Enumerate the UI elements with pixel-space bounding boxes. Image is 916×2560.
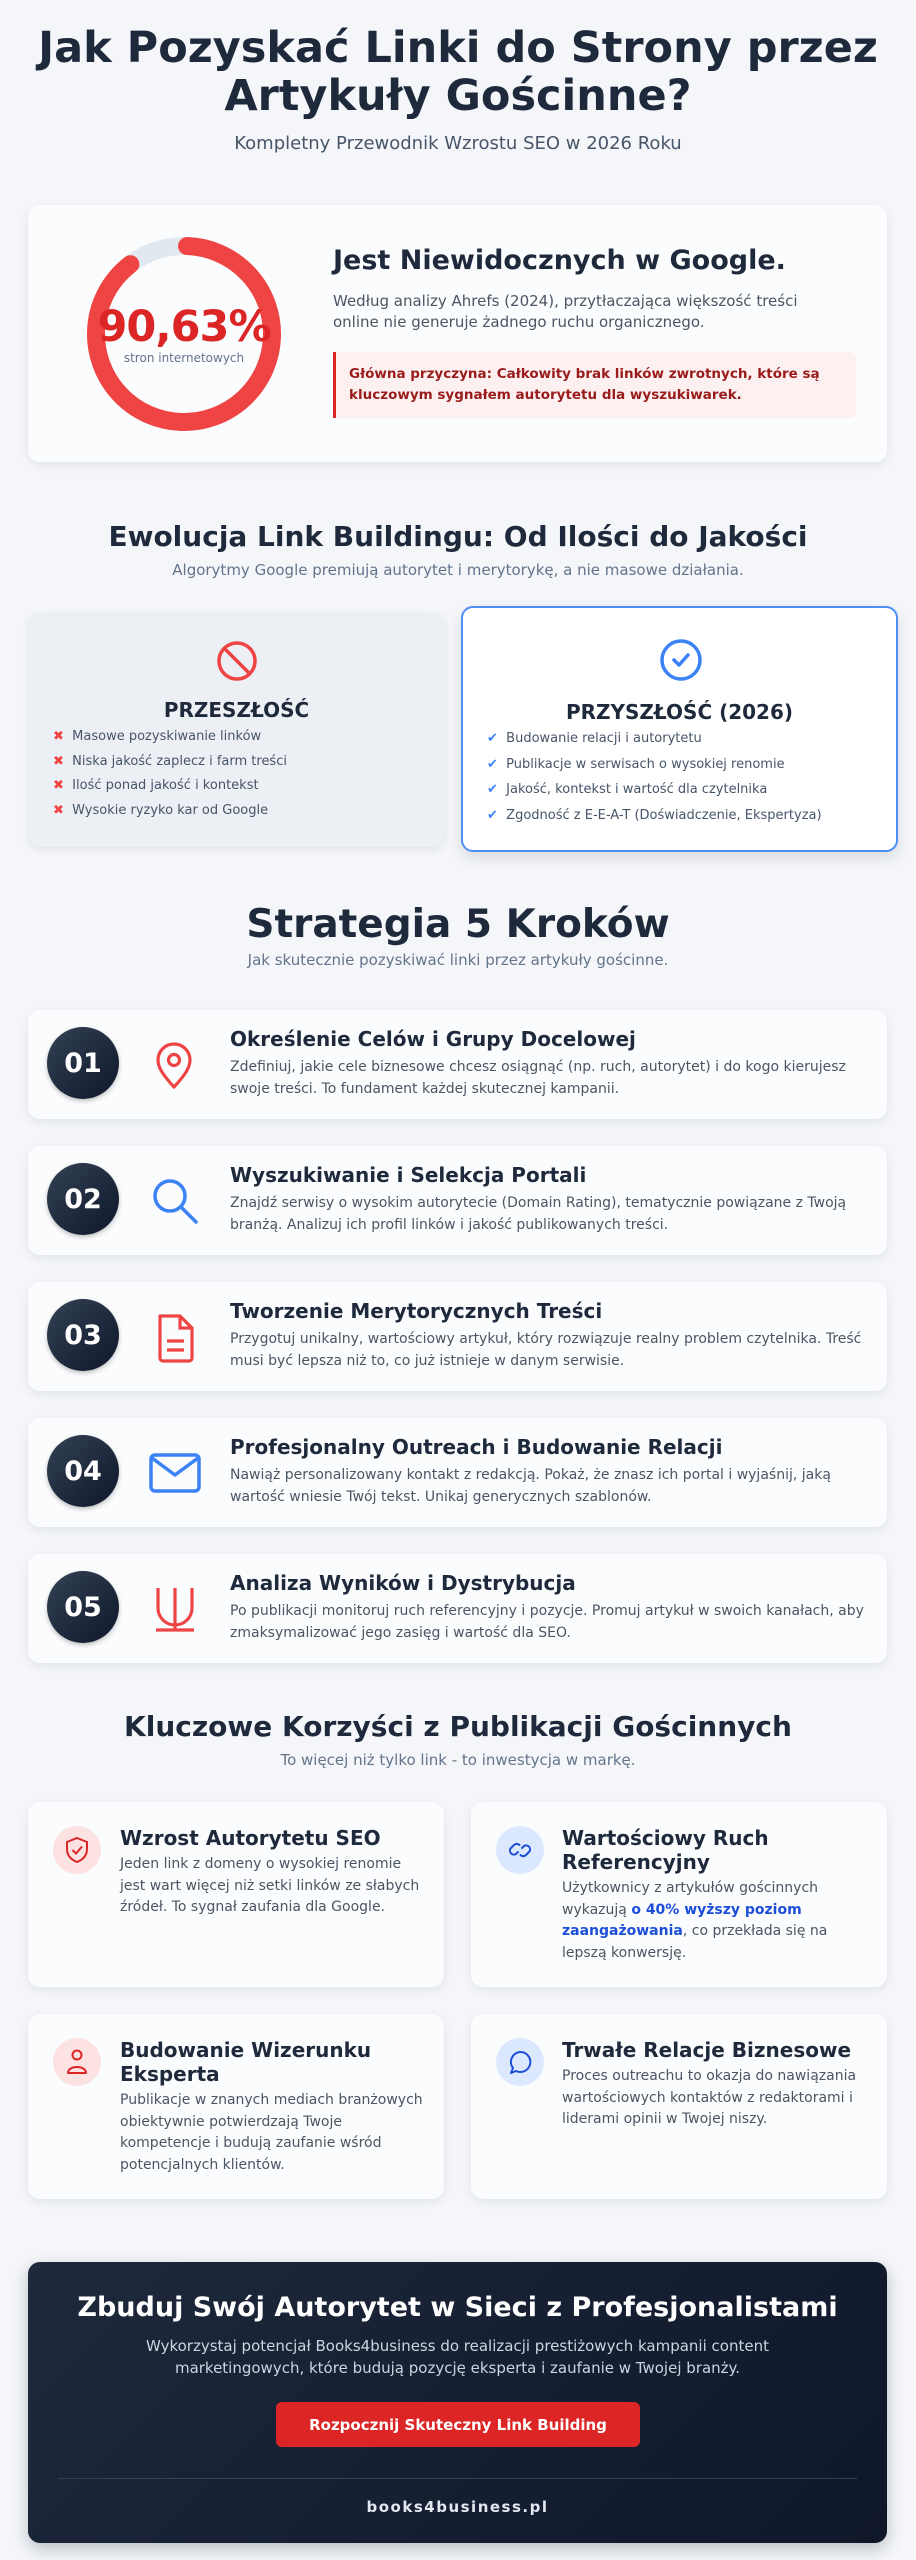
title: Artykuły Gościnne? <box>224 71 692 121</box>
heading: evolution: Ewolucja Link Buildingu: Od Ilości do Jakości <box>108 520 808 553</box>
panel: statistic <box>28 205 887 462</box>
icon: analytics <box>156 1588 194 1632</box>
list: ✔ Jakość, kontekst i wartość dla czytelnika <box>487 782 767 797</box>
step text: Przygotuj unikalny, wartościowy artykuł, który rozwiązuje realny problem czytelnika. Treść musi być lepsza niż to, co już istnieje w danym serwisie. <box>230 1331 861 1369</box>
icon: shield <box>53 1826 101 1874</box>
icon: chat <box>496 2038 544 2086</box>
heading: strategy: Strategia 5 Kroków <box>246 902 670 947</box>
text: Publikacje w znanych mediach branżowych obiektywnie potwierdzają Twoje kompetencje i budują zaufanie wśród potencjalnych klientów. <box>120 2092 423 2172</box>
step title: Tworzenie Merytorycznych Treści <box>230 1299 602 1323</box>
CTA text: Wykorzystaj potencjał Books4business do realizacji prestiżowych kampanii content marketingowych, które budują pozycję eksperta i zaufanie w Twojej branży. <box>146 2337 769 2377</box>
list <box>487 731 822 822</box>
step 4 <box>28 1418 887 1527</box>
step title: Określenie Celów i Grupy Docelowej <box>230 1027 636 1051</box>
icon: check circle <box>660 639 702 681</box>
step title: Profesjonalny Outreach i Budowanie Relacji <box>230 1435 722 1459</box>
step text: Po publikacji monitoruj ruch referencyjny i pozycje. Promuj artykuł w swoich kanałach, aby zmaksymalizować jego zasięg i wartość dla SEO. <box>230 1603 864 1641</box>
number <box>47 1571 119 1643</box>
step title: Analiza Wyników i Dystrybucja <box>230 1571 576 1595</box>
list: ✖ Niska jakość zaplecz i farm treści <box>53 754 287 768</box>
list: ✖ Ilość ponad jakość i kontekst <box>53 778 259 793</box>
list: ✔ Publikacje w serwisach o wysokiej renomie <box>487 756 785 772</box>
benefit 4 <box>471 2014 887 2199</box>
step 3 <box>28 1282 887 1391</box>
number: 05 <box>64 1592 102 1622</box>
benefit 1 <box>28 1802 444 1987</box>
title: Jak Pozyskać Linki do Strony przez <box>38 23 878 73</box>
number <box>47 1027 119 1099</box>
number: 04 <box>64 1456 102 1486</box>
text: Proces outreachu to okazja do nawiązania wartościowych kontaktów z redaktorami i liderami opinii w Twojej niszy. <box>562 2068 856 2127</box>
stat label: stron internetowych <box>124 351 244 365</box>
benefit 3 <box>28 2014 444 2199</box>
icon: link <box>496 1826 544 1874</box>
icon: forbidden <box>217 641 257 681</box>
title: Budowanie Wizerunku Eksperta <box>120 2038 371 2086</box>
heading: PRZYSZŁOŚĆ (2026) <box>566 700 793 724</box>
text: Jeden link z domeny o wysokiej renomie jest wart więcej niż setki linków ze słabych źródeł. To sygnał zaufania dla Google. <box>120 1856 419 1915</box>
number: 01 <box>64 1048 102 1078</box>
list: ✖ Masowe pozyskiwanie linków <box>53 729 261 744</box>
icon: document <box>158 1314 194 1363</box>
step text: Nawiąż personalizowany kontakt z redakcją. Pokaż, że znasz ich portal i wyjaśnij, jaką wartość wniesie Twój tekst. Unikaj generycznych szablonów. <box>230 1467 831 1505</box>
benefit 2 <box>471 1802 887 1987</box>
list <box>53 729 287 818</box>
step title: Wyszukiwanie i Selekcja Portali <box>230 1163 586 1187</box>
button <box>276 2402 640 2447</box>
title: Wartościowy Ruch Referencyjny <box>562 1826 769 1874</box>
number <box>47 1435 119 1507</box>
text block: Według analizy Ahrefs (2024), przytłaczająca większość treści online nie generuje żadnego ruchu organicznego. <box>333 292 798 331</box>
step 5 <box>28 1554 887 1663</box>
stat number: 90,63% <box>97 302 271 352</box>
subheading: Jak skutecznie pozyskiwać linki przez artykuły gościnne. <box>248 951 668 969</box>
button: Rozpocznij Skuteczny Link Building <box>309 2416 607 2434</box>
callout <box>333 352 856 418</box>
title: Wzrost Autorytetu SEO <box>120 1826 381 1850</box>
panel: future <box>461 606 898 852</box>
footer brand: books4business.pl <box>367 2498 548 2516</box>
text: Użytkownicy z artykułów gościnnych wykazują o 40% wyższy poziom zaangażowania, co przekłada się na lepszą konwersję. <box>562 1880 827 1960</box>
step text: Znajdź serwisy o wysokim autorytecie (Domain Rating), tematycznie powiązane z Twoją branżą. Analizuj ich profil linków i jakość publikowanych treści. <box>230 1195 846 1233</box>
number <box>47 1163 119 1235</box>
icon: person <box>53 2038 101 2086</box>
subtitle: Kompletny Przewodnik Wzrostu SEO w 2026 Roku <box>234 133 682 154</box>
subheading: To więcej niż tylko link - to inwestycja w markę. <box>280 1751 636 1769</box>
icon: envelope <box>149 1453 201 1493</box>
number: 02 <box>64 1184 102 1214</box>
icon: search <box>153 1179 198 1224</box>
step 1 <box>28 1010 887 1119</box>
callout: Główna przyczyna: Całkowity brak linków zwrotnych, które są kluczowym sygnałem autorytetu dla wyszukiwarek. <box>349 366 820 403</box>
CTA heading: Zbuduj Swój Autorytet w Sieci z Profesjonalistami <box>77 2292 838 2323</box>
number <box>47 1299 119 1371</box>
heading: benefits: Kluczowe Korzyści z Publikacji Gościnnych <box>124 1710 792 1743</box>
heading: PRZESZŁOŚĆ <box>164 698 309 722</box>
chart: donut 90,63% <box>87 237 281 431</box>
step text: Zdefiniuj, jakie cele biznesowe chcesz osiągnąć (np. ruch, autorytet) i do kogo kierujesz swoje treści. To fundament każdej skutecznej kampanii. <box>230 1059 846 1097</box>
title: Trwałe Relacje Biznesowe <box>562 2038 851 2062</box>
heading: Jest Niewidocznych w Google. <box>333 245 786 276</box>
list: ✖ Wysokie ryzyko kar od Google <box>53 802 268 818</box>
step 2 <box>28 1146 887 1255</box>
title <box>36 23 878 121</box>
number: 03 <box>64 1320 102 1350</box>
panel: past <box>28 612 445 847</box>
list: ✔ Zgodność z E-E-A-T (Doświadczenie, Ekspertyza) <box>487 808 822 822</box>
icon: map pin <box>156 1042 192 1089</box>
list: ✔ Budowanie relacji i autorytetu <box>487 731 702 746</box>
subheading: Algorytmy Google premiują autorytet i merytorykę, a nie masowe działania. <box>172 561 744 579</box>
panel: CTA <box>28 2262 887 2543</box>
